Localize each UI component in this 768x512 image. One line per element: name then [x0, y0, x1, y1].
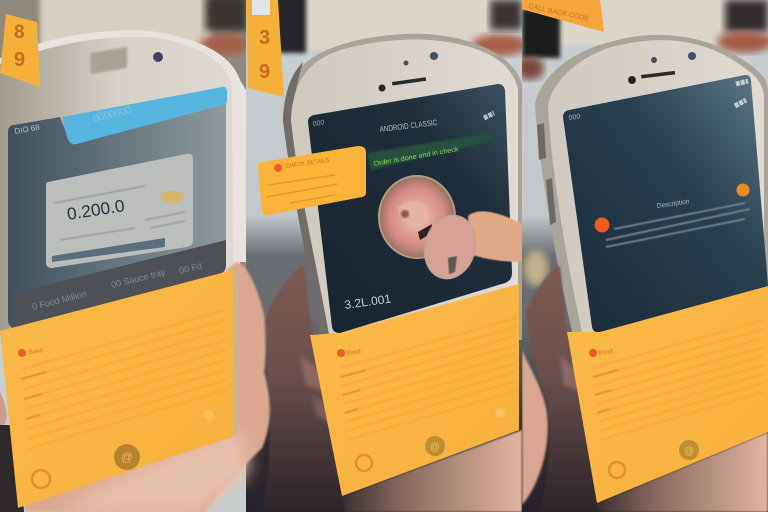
finger [468, 211, 522, 262]
panel: right phone: CALL BACK CODE [528, 3, 590, 23]
sheet: red heading icon [337, 349, 345, 357]
tag: banner [521, 0, 604, 32]
hand: left fingers [262, 264, 345, 512]
hand: lower skin [20, 262, 270, 512]
sheet: bold short lines [593, 370, 618, 413]
panel: left phone: @ [121, 450, 133, 464]
sheet: circle button small [32, 470, 50, 488]
sheet: circle button small [609, 462, 625, 478]
panel: left phone: 8 [14, 22, 25, 43]
sheet: red heading icon [589, 349, 597, 357]
sensors and earpiece [378, 52, 438, 92]
panel: middle phone: Order is done and in check [373, 146, 460, 168]
orange icon right [736, 184, 750, 196]
sheet: red heading icon [18, 349, 26, 357]
yellow sheet [567, 286, 768, 503]
green banner [367, 133, 491, 170]
blue header tab [62, 87, 227, 144]
screen heading: Description [656, 198, 690, 210]
camera [153, 52, 163, 62]
panel: left phone: 9 [14, 49, 25, 71]
phone body [283, 34, 522, 340]
coin small [424, 214, 476, 280]
card amount: 0.200.0 [66, 196, 126, 224]
sheet: bold short lines [21, 372, 46, 419]
sheet: text lines [592, 320, 764, 440]
amount: 3.2L.001 [343, 292, 392, 312]
panel: middle phone: CHECK DETAILS [285, 158, 330, 170]
panel: right phone [516, 0, 768, 512]
tag: numbers [246, 0, 284, 97]
sensors and earpiece [628, 52, 696, 84]
sheet: circle button large [425, 436, 445, 456]
panel: right phone: @ [684, 446, 694, 457]
screen [563, 75, 768, 332]
card footer bar [52, 238, 165, 262]
card [46, 154, 193, 268]
hand: bottom skin [597, 432, 768, 512]
status icons: 000 [568, 113, 581, 122]
panel: left phone: 00 Sauce tray [110, 267, 167, 290]
sheet: circle button large [679, 440, 699, 460]
panel: left phone: 00 Fd [178, 261, 203, 276]
phone body [535, 35, 768, 345]
screen text lines [606, 203, 750, 247]
screen title: ANDROID CLASSIC [379, 118, 438, 134]
card caption lines [54, 186, 185, 240]
yellow sheet [0, 270, 234, 508]
sheet: faint icon [204, 410, 214, 420]
speaker grille [90, 47, 127, 74]
screen [8, 96, 226, 330]
panel: middle phone: 9 [259, 61, 270, 83]
sheet: circle button large [114, 444, 140, 470]
tag: numbers [0, 14, 40, 87]
screen [308, 84, 512, 333]
panel: middle phone: @ [430, 442, 440, 453]
orange callout [258, 146, 366, 215]
status text: DIO 68 [14, 123, 41, 136]
coin large [379, 176, 455, 258]
panel: left phone [0, 0, 270, 512]
blue header text: 0000000 [92, 105, 133, 125]
footer labels: 0 Food Million [31, 289, 88, 312]
sheet: bold short lines [341, 370, 366, 413]
card pill [160, 191, 184, 203]
hand: previous panel skin [522, 350, 548, 505]
orange icon left [594, 218, 610, 232]
hand: bottom skin [342, 430, 522, 512]
phone edge strip [232, 270, 238, 436]
panel: middle phone: 3 [259, 27, 270, 49]
status icons: 000 [312, 119, 325, 128]
phone body [0, 31, 246, 335]
yellow sheet [310, 284, 519, 496]
sheet: text lines [22, 310, 226, 449]
sheet: heading: Bond [28, 348, 43, 356]
sheet: text lines [340, 318, 516, 440]
panel: middle phone [246, 0, 528, 512]
hand: left fingers [526, 265, 600, 512]
sheet: heading: Bond [346, 349, 361, 357]
side buttons [537, 123, 556, 225]
sheet: circle button small [356, 455, 372, 471]
sheet: faint icon [495, 408, 505, 418]
screen: lower dark band [14, 240, 226, 329]
sheet: heading: Bond [598, 349, 613, 357]
